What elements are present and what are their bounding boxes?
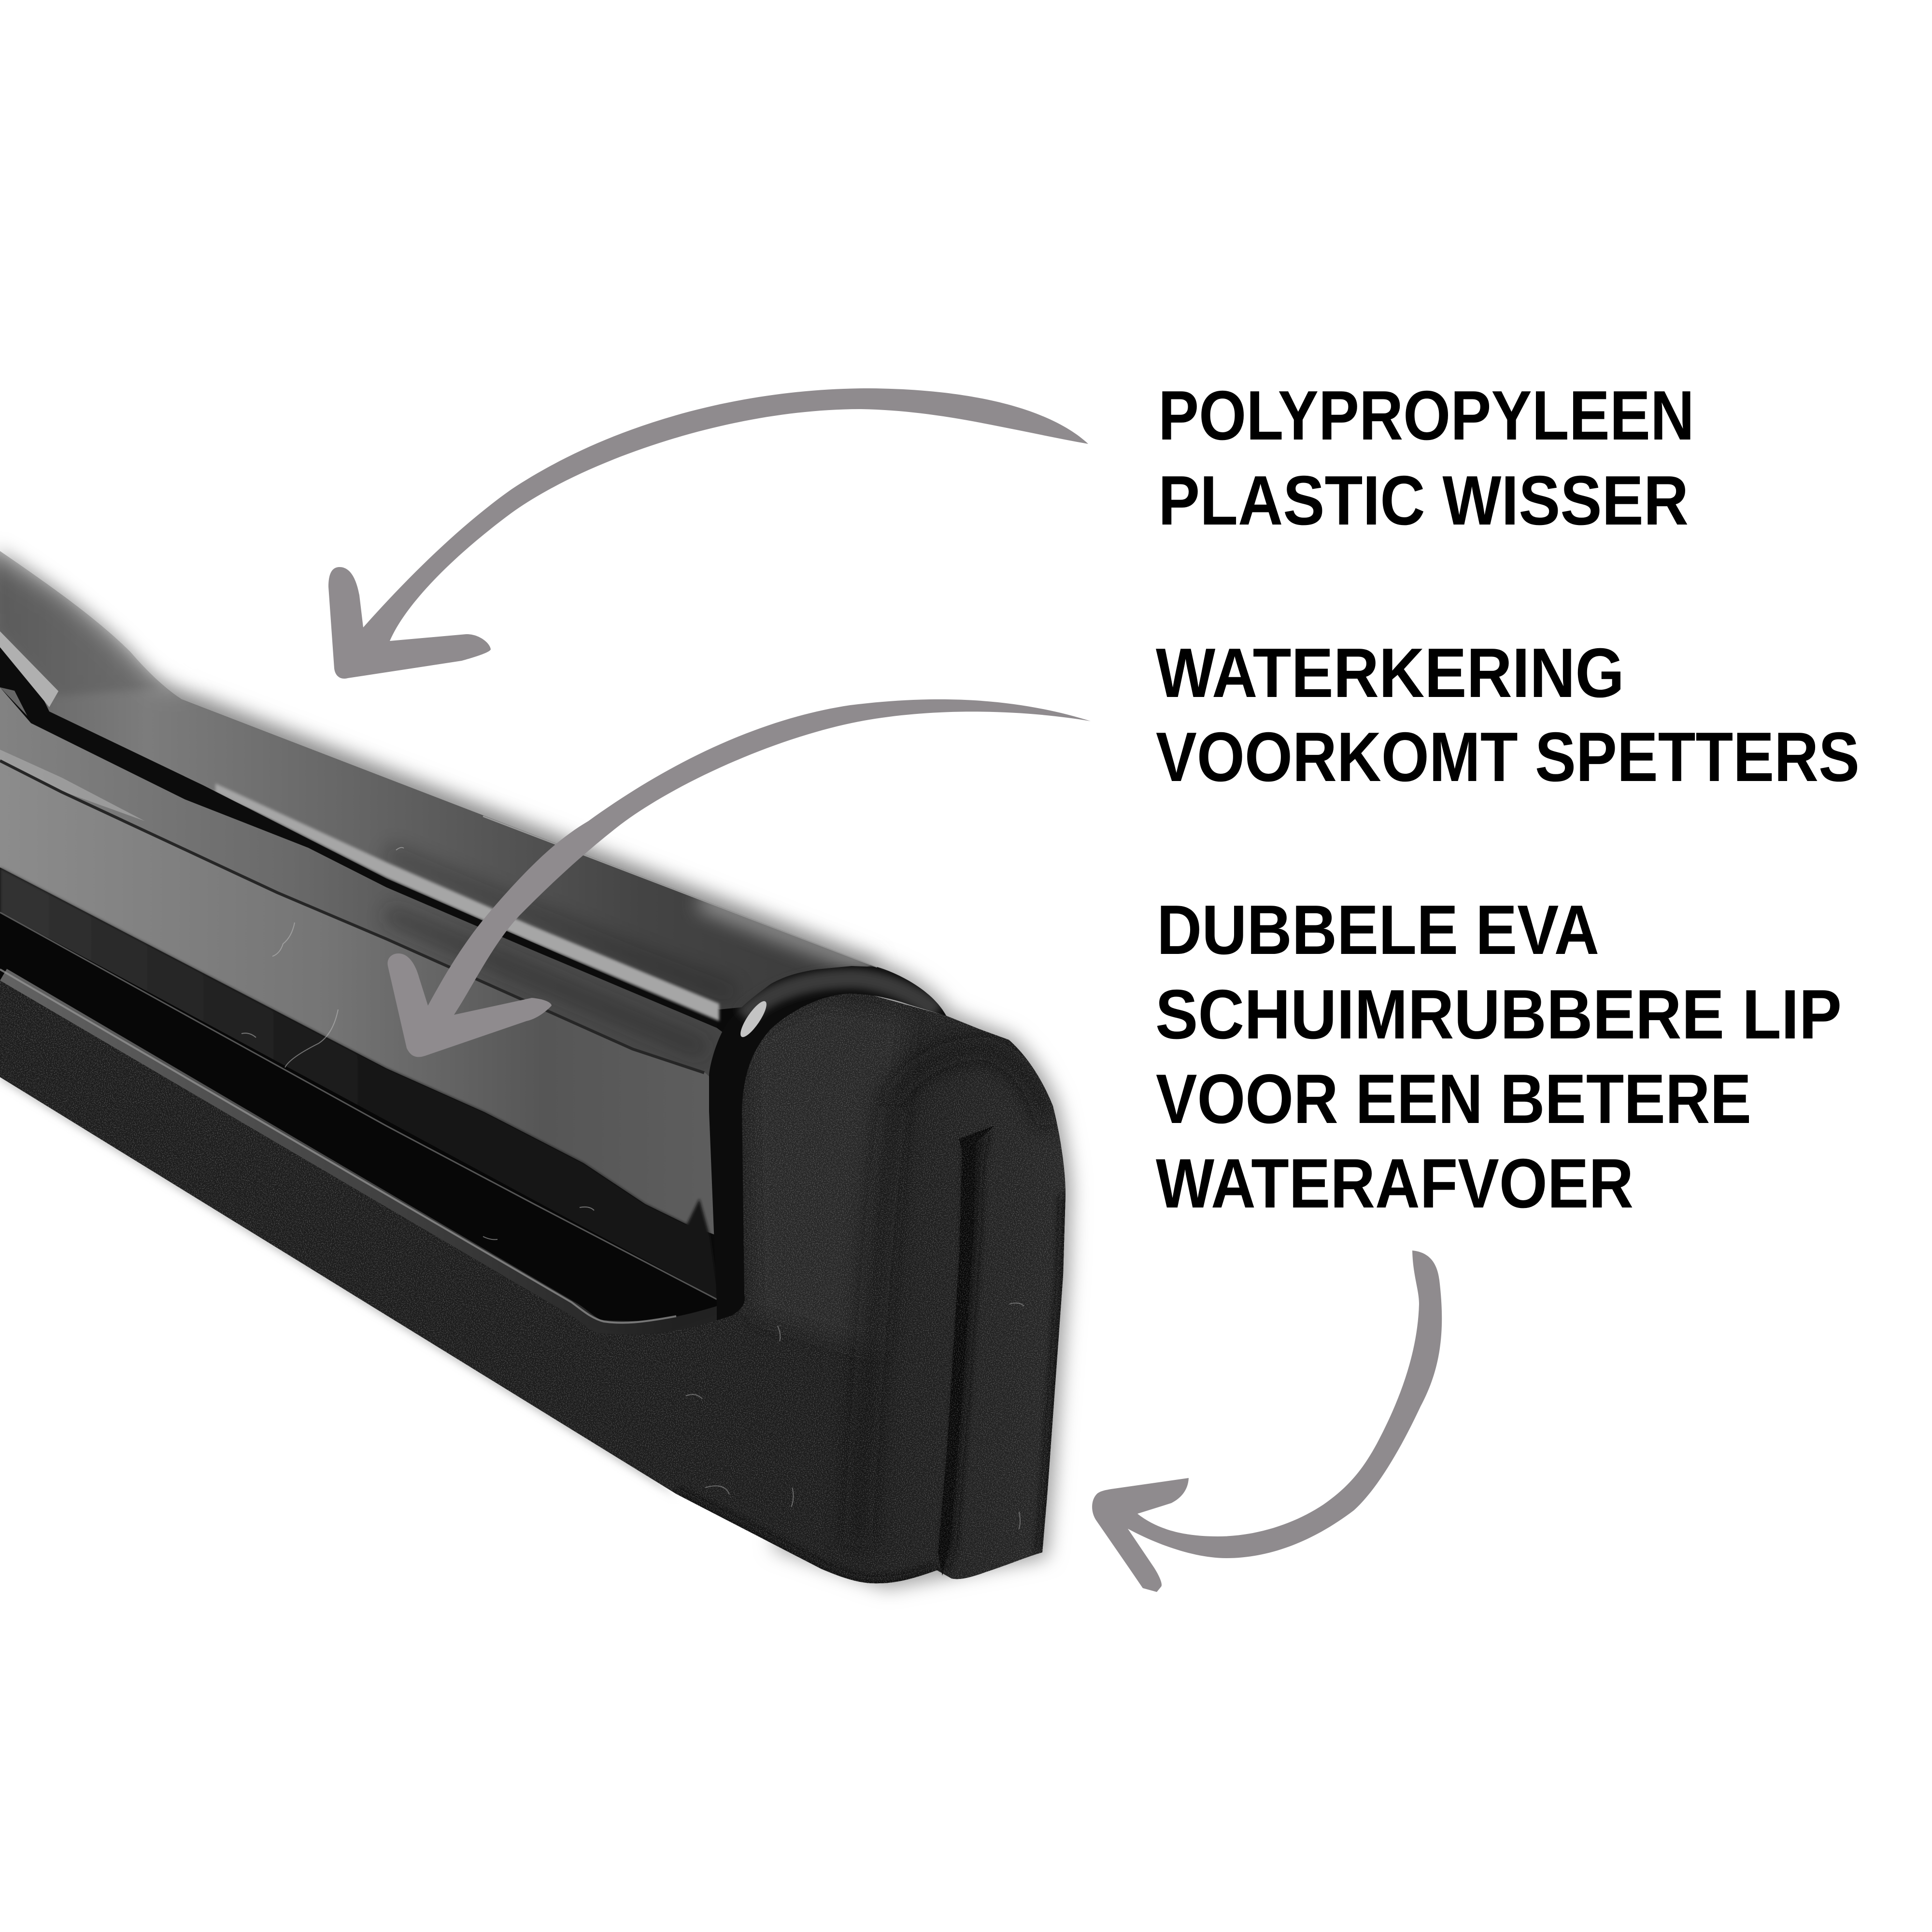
text block: polypropyleen plastic wisser — [1158, 376, 1694, 540]
slot in foam — [938, 1125, 995, 1576]
dust specks — [686, 1303, 1024, 1529]
text block: dubbele eva schuimrubbere lip: WATERAFVOER — [1156, 1144, 1634, 1222]
light reflection beside groove — [0, 631, 58, 707]
foam fold — [854, 1113, 906, 1360]
lower black section — [0, 912, 746, 1338]
rim glare — [737, 998, 770, 1040]
foam right edge shading — [1042, 1195, 1065, 1552]
top band lower shading — [386, 852, 734, 995]
black groove — [0, 643, 717, 1028]
mid band dark streak — [386, 913, 705, 1051]
foam bottom edge shading — [676, 1494, 937, 1583]
text block: waterkering voorkomt spetters: WATERKERING — [1156, 634, 1624, 712]
text block: waterkering voorkomt spetters — [1156, 634, 1860, 796]
text block: polypropyleen plastic wisser: PLASTIC WISSER — [1158, 461, 1689, 540]
rim top sheen — [744, 979, 937, 1017]
transparent lip band — [0, 980, 731, 1335]
top edge highlight — [483, 816, 877, 967]
squeegee photo — [0, 435, 1087, 1594]
end rim of plastic — [709, 966, 966, 1352]
lower dark band — [0, 867, 720, 1304]
main face — [0, 759, 720, 1236]
arrow: waterkering — [387, 699, 1091, 1057]
top band upper highlight near end — [700, 899, 874, 966]
foam cap shading — [889, 1048, 1048, 1125]
feathered cut-out at handle — [0, 435, 290, 681]
text block: dubbele eva schuimrubbere lip: DUBBELE EVA — [1157, 891, 1599, 969]
foam grain — [0, 966, 1087, 1594]
text block: dubbele eva schuimrubbere lip: SCHUIMRUBBERE LIP — [1155, 975, 1842, 1053]
secondary ridge line — [0, 761, 704, 1073]
mid band — [0, 687, 724, 1077]
handle socket shading — [0, 551, 163, 696]
lip highlight line — [0, 969, 676, 1323]
light stripe above groove — [215, 783, 719, 1021]
text block: polypropyleen plastic wisser: POLYPROPYLEEN — [1158, 376, 1694, 455]
secondary ridge highlight — [0, 750, 145, 821]
arrow: polypropyleen — [328, 388, 1088, 679]
black plastic wiper body — [0, 531, 966, 1352]
foam side face near plastic — [754, 1007, 901, 1340]
soft shadow around squeegee — [0, 541, 1071, 1588]
foam end face — [676, 985, 1087, 1594]
top surface band — [0, 531, 884, 1009]
arrow: dubbele lip — [1092, 1250, 1442, 1592]
text block: dubbele eva schuimrubbere lip — [1155, 891, 1842, 1222]
foam rubber lip — [0, 966, 1087, 1594]
thin line on black section — [0, 912, 717, 1299]
text block: dubbele eva schuimrubbere lip: VOOR EEN BETERE — [1156, 1060, 1751, 1138]
surface scratches — [242, 848, 594, 1239]
